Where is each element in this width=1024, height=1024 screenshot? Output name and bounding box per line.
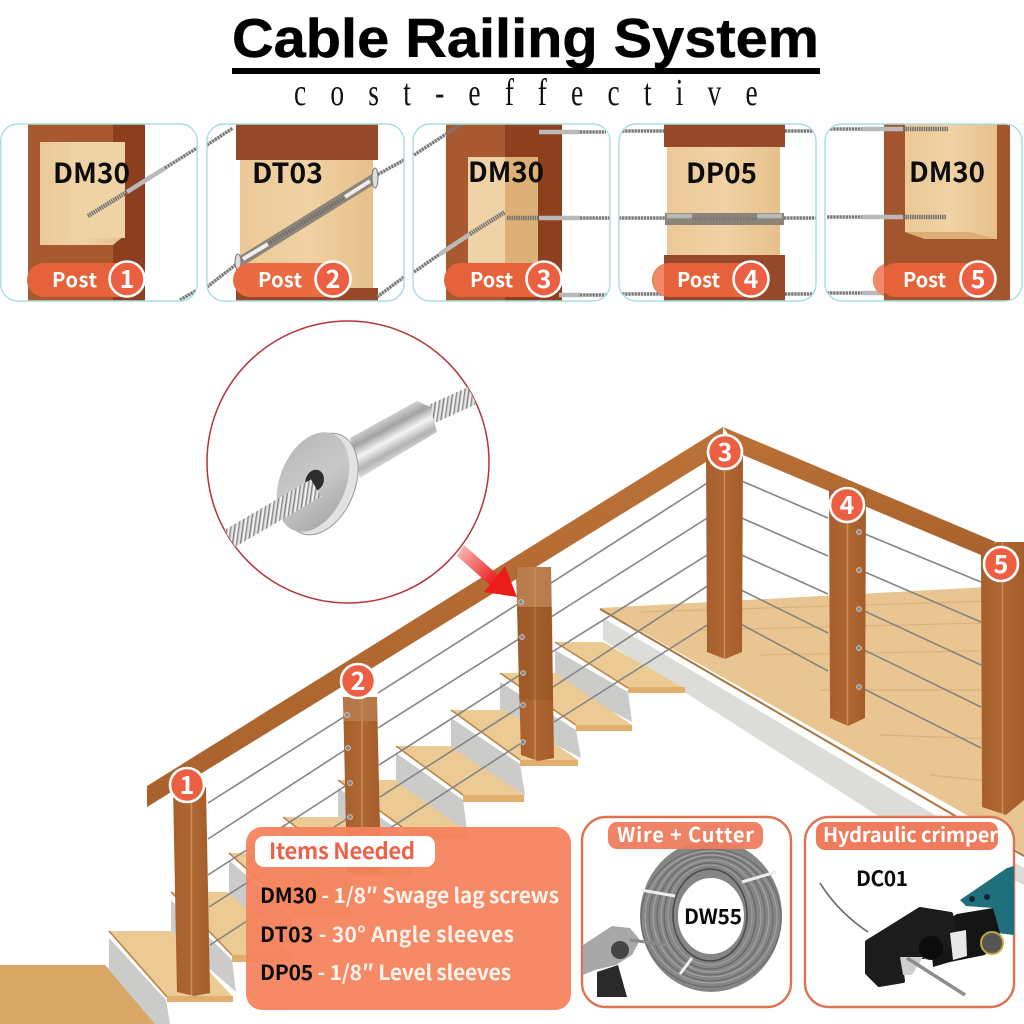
post badge: 1 xyxy=(120,260,134,296)
item: DT03: DT03 - 30° Angle sleeves xyxy=(260,919,514,949)
panel: post 2 xyxy=(207,124,404,301)
product code: DW55 xyxy=(684,901,742,931)
icon: wire coil xyxy=(641,849,781,987)
post 3 xyxy=(706,455,743,659)
subtitle: cost-effective xyxy=(294,72,758,114)
label: DP05 xyxy=(686,152,757,192)
item: DP05: DP05 - 1/8″ Level sleeves xyxy=(260,957,511,987)
item: DM30: DM30 - 1/8″ Swage lag screws xyxy=(260,880,559,910)
panel: wire and cutter xyxy=(582,817,791,1007)
post badge: Post xyxy=(258,264,303,293)
post badge xyxy=(27,260,144,297)
post badge xyxy=(873,260,996,297)
icon: crimper tool xyxy=(820,866,1014,995)
posts xyxy=(173,455,1024,996)
post badge: 5 xyxy=(971,260,985,296)
post badge: Post xyxy=(52,264,98,293)
panel: hydraulic crimper xyxy=(805,817,1014,1007)
number badges: 3 xyxy=(718,433,732,469)
icon: flange disc xyxy=(276,432,358,536)
heading pill: Hydraulic crimper xyxy=(823,819,998,848)
post A, detail xyxy=(516,567,554,761)
handrail xyxy=(147,427,996,807)
number badges: 5 xyxy=(994,545,1008,581)
number badges: 4 xyxy=(840,486,855,522)
cables xyxy=(208,479,981,945)
heading pill: Wire + Cutter xyxy=(617,819,754,848)
post 1 xyxy=(173,787,210,996)
post badge: 4 xyxy=(744,260,759,296)
icon: sleeve xyxy=(350,401,437,478)
number badges xyxy=(170,433,1018,802)
icon: cable near end xyxy=(222,488,316,543)
post 5 xyxy=(981,542,1024,815)
panel: post 3 xyxy=(413,123,610,301)
post badge xyxy=(444,260,562,297)
title: Cable Railing System xyxy=(232,7,819,69)
arrow xyxy=(457,545,517,597)
ground floor xyxy=(0,965,165,1024)
post badge: Post xyxy=(470,264,514,293)
label: DM30 xyxy=(909,151,985,191)
number badges: 2 xyxy=(351,662,365,698)
post badge: 2 xyxy=(326,260,340,296)
heading pill: Items Needed xyxy=(269,834,415,866)
post badge xyxy=(652,260,768,297)
icon: cable cutter xyxy=(583,926,668,997)
post 4 xyxy=(829,490,866,726)
stair treads xyxy=(109,642,685,1024)
stair illustration xyxy=(0,427,1024,1024)
post badge xyxy=(233,260,350,297)
cable fittings xyxy=(345,530,861,819)
label: DT03 xyxy=(252,152,323,192)
post badge: Post xyxy=(677,264,721,293)
panel: post 5 xyxy=(825,124,1022,301)
product code: DC01 xyxy=(856,863,908,893)
panel: post 1 xyxy=(1,124,197,301)
panel: post 4 xyxy=(619,124,816,301)
icon: cable far end xyxy=(425,392,480,417)
panel: items needed xyxy=(246,827,571,1010)
number badges: 1 xyxy=(180,766,194,802)
post badge: Post xyxy=(903,264,947,293)
magnifier: swage fitting detail xyxy=(207,321,489,603)
label: DM30 xyxy=(53,152,130,192)
post badge: 3 xyxy=(537,260,551,296)
post 2 xyxy=(343,697,381,873)
landing deck xyxy=(600,585,1024,885)
label: DM30 xyxy=(468,151,544,191)
